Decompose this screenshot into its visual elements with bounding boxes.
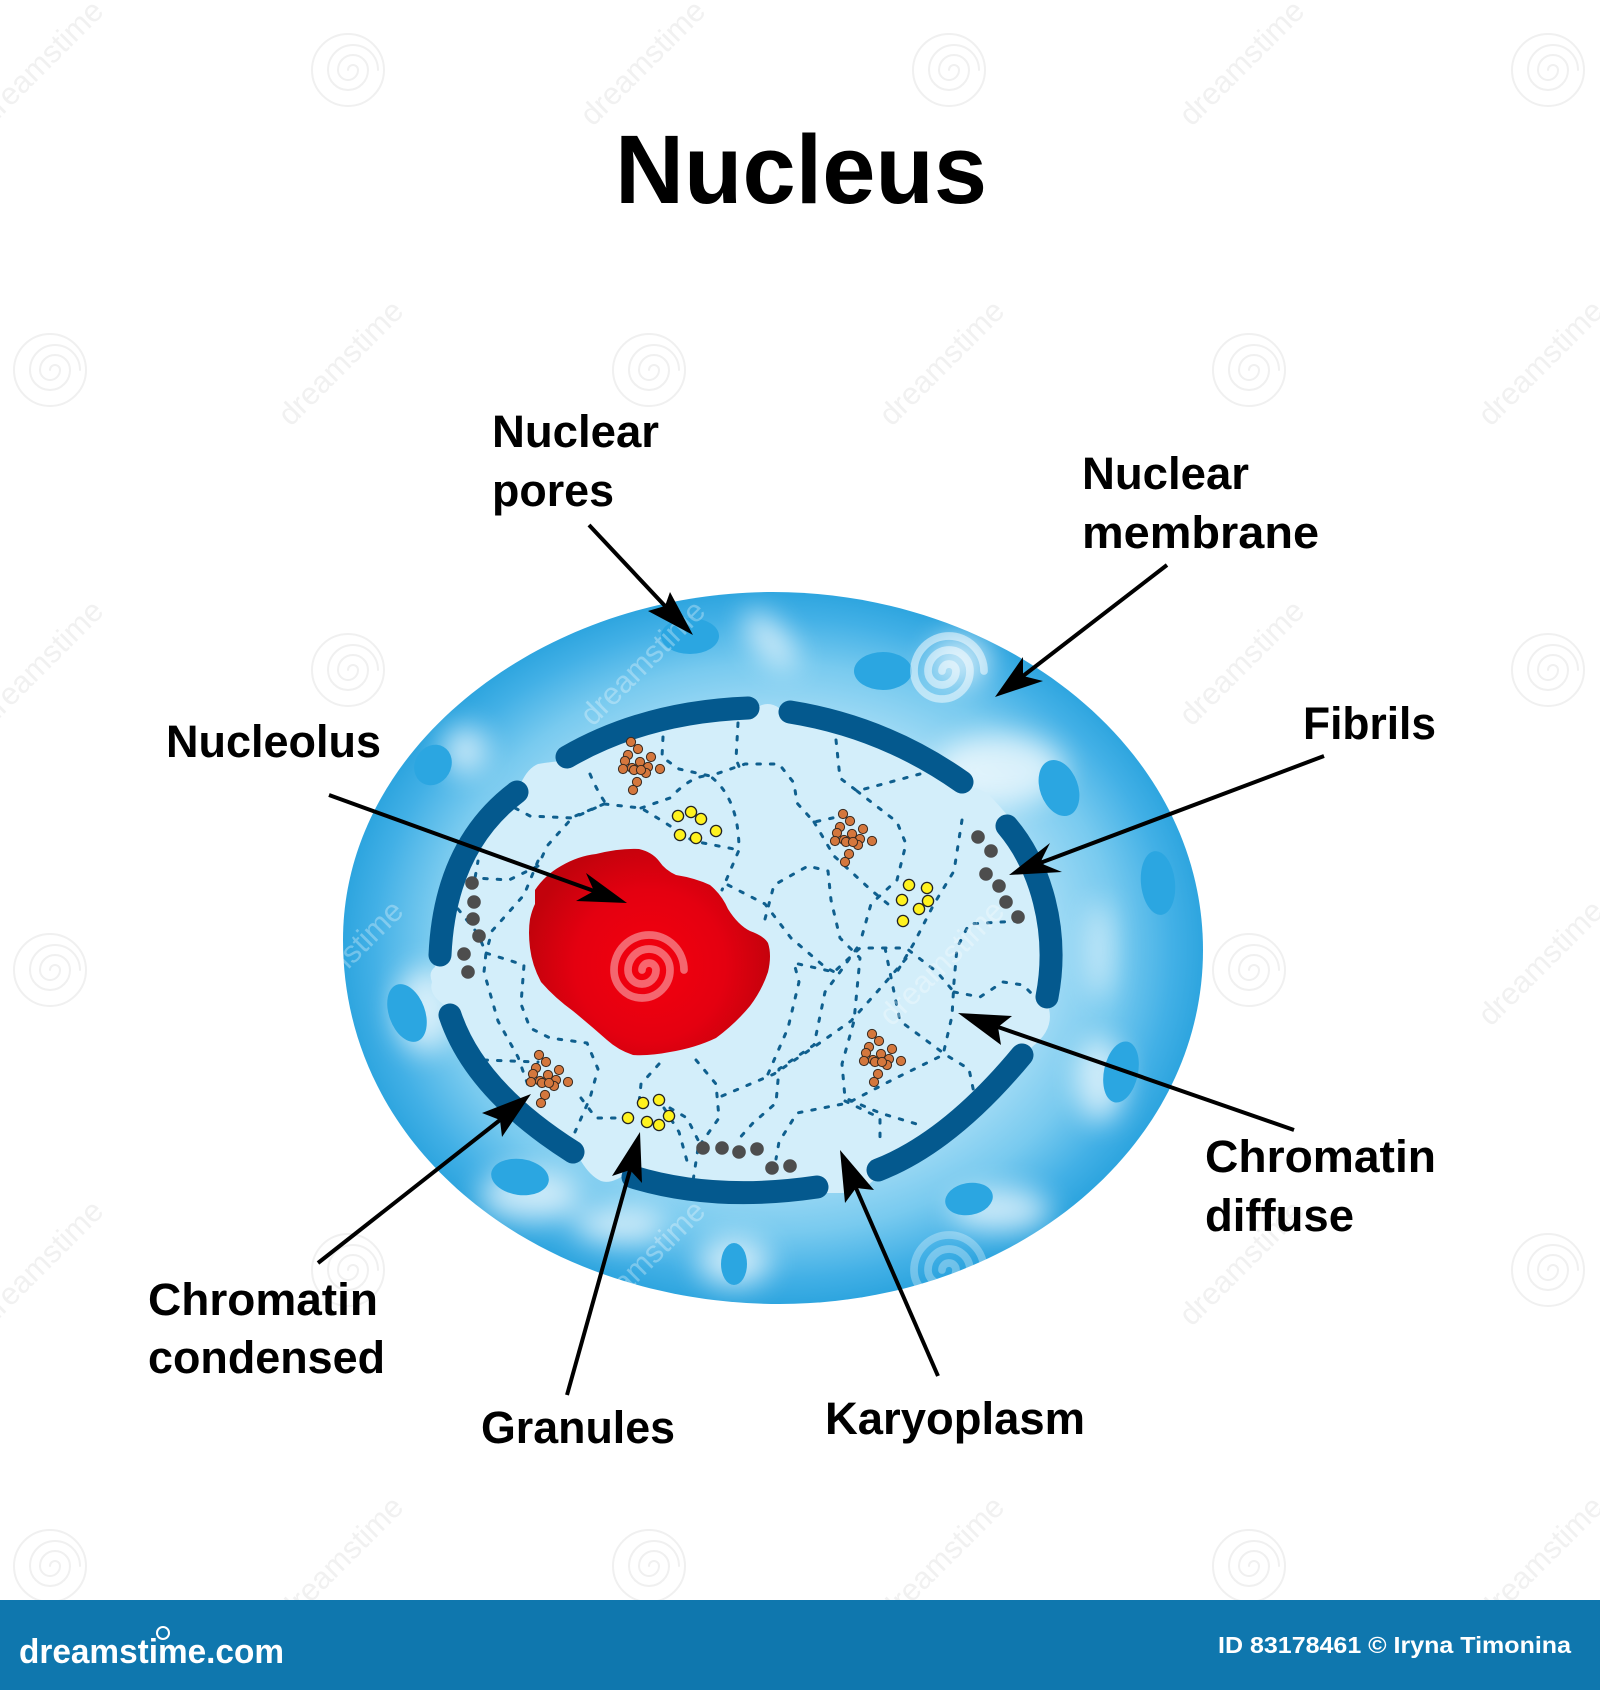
karyoplasm	[431, 704, 1060, 1194]
brown granule clusters	[526, 737, 906, 1108]
label: nucleolus: Nucleolus	[166, 716, 381, 767]
nucleus diagram	[343, 592, 1203, 1304]
label: nuclear pores: Nuclear	[492, 406, 659, 457]
label: nuclear pores: pores	[492, 465, 614, 516]
arrow: nuclear pores	[589, 525, 693, 635]
outer nucleus body	[343, 592, 1203, 1304]
watermark over diagram: dreamstime	[872, 893, 1011, 1032]
watermark over diagram: dreamstime	[573, 593, 712, 732]
watermark over diagram: dreamstime	[573, 1193, 712, 1332]
chromatin fibrils dashed network	[458, 723, 1035, 1181]
label: nuclear membrane: Nuclear	[1082, 448, 1249, 499]
watermark over diagram	[271, 593, 1011, 1332]
arrow: nuclear membrane	[995, 565, 1167, 697]
label: chromatin diffuse: diffuse	[1205, 1190, 1354, 1241]
nuclear pores	[380, 618, 1178, 1285]
watermark pattern: dreamstime	[1172, 1193, 1311, 1332]
arrow: karyoplasm	[840, 1150, 938, 1376]
arrow: granules	[567, 1132, 642, 1395]
label: nuclear membrane	[1082, 448, 1319, 558]
label: chromatin condensed	[148, 1274, 385, 1383]
label: granules: Granules	[481, 1402, 675, 1453]
rim highlights	[395, 602, 1124, 1286]
footer credit: ID 83178461 © Iryna Timonina	[1218, 1632, 1571, 1658]
watermark pattern: dreamstime	[872, 293, 1011, 432]
label: nuclear membrane: membrane	[1082, 507, 1319, 558]
label: chromatin diffuse	[1205, 1131, 1436, 1241]
label: chromatin condensed: condensed	[148, 1332, 385, 1383]
label: nuclear pores	[492, 406, 659, 516]
condensed chromatin dots	[457, 830, 1025, 1175]
nuclear membrane segments	[440, 708, 1051, 1193]
nucleolus	[529, 849, 770, 1055]
footer bar	[0, 1600, 1600, 1690]
arrow: fibrils	[1009, 756, 1324, 875]
watermark pattern: dreamstime	[271, 293, 410, 432]
yellow granules	[622, 806, 934, 1131]
watermark pattern: dreamstime	[1172, 593, 1311, 732]
label: fibrils: Fibrils	[1303, 698, 1436, 749]
label: chromatin condensed: Chromatin	[148, 1274, 378, 1325]
watermark pattern: dreamstime	[872, 1489, 1011, 1628]
label: karyoplasm: Karyoplasm	[825, 1393, 1085, 1444]
watermark over diagram: dreamstime	[271, 893, 410, 1032]
label: chromatin diffuse: Chromatin	[1205, 1131, 1436, 1182]
arrow: chromatin diffuse	[958, 1013, 1294, 1130]
footer logo: dreamstime.com	[19, 1633, 284, 1671]
arrow: chromatin condensed	[318, 1094, 531, 1263]
arrow: nucleolus	[329, 795, 627, 903]
watermark pattern: dreamstime	[271, 1489, 410, 1628]
title: Nucleus	[615, 115, 987, 224]
